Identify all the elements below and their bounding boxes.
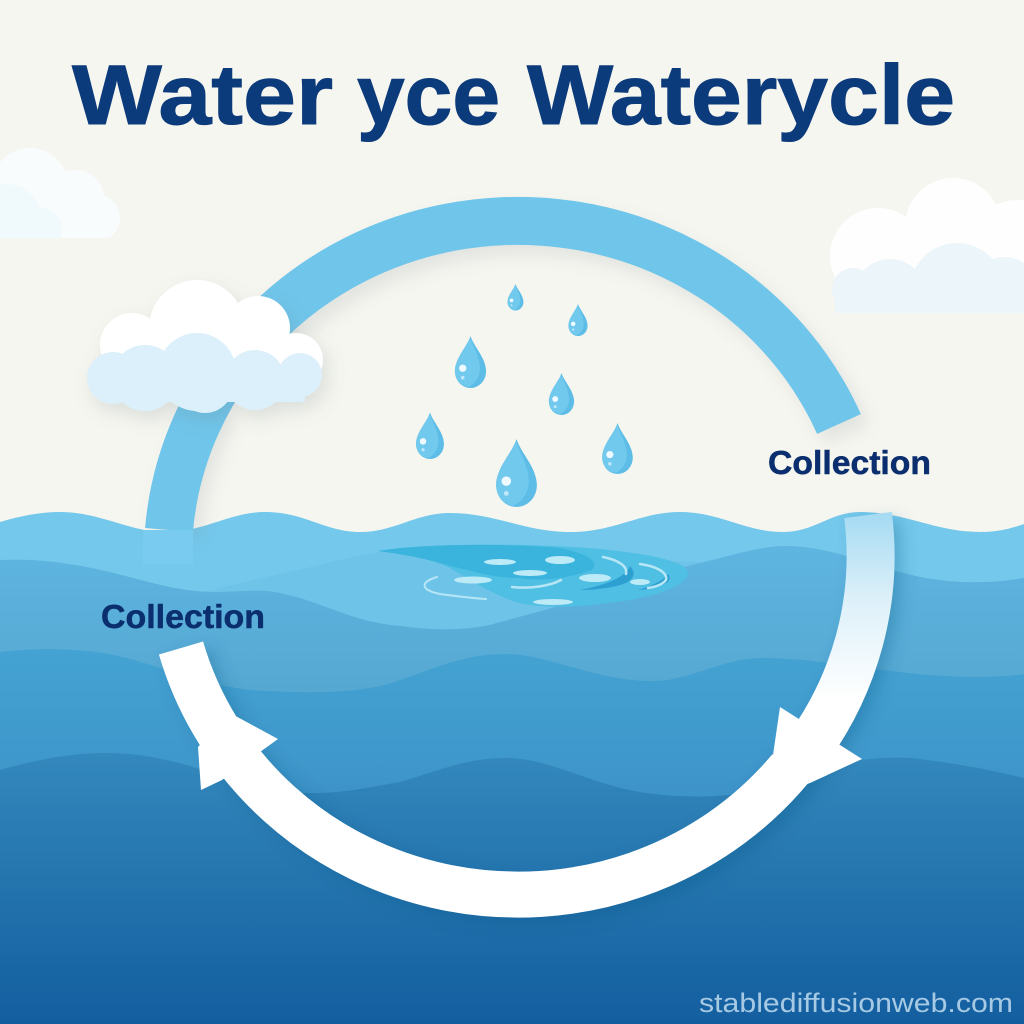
central pool [378, 545, 688, 607]
title [72, 48, 955, 142]
cloud: main left [87, 280, 323, 413]
drop 1 [508, 284, 523, 310]
arc: bottom white arrow [181, 648, 790, 895]
drop 2 [568, 304, 588, 336]
water: third layer [0, 649, 1024, 1024]
pool: swooshes [580, 566, 670, 590]
arrowhead: left [198, 713, 278, 790]
title: yce [357, 48, 500, 142]
pool: dark core [378, 545, 594, 580]
label: collection left: Collection [101, 598, 265, 635]
label: collection right: Collection [768, 444, 931, 481]
drop 4 [549, 373, 574, 415]
drop 5 [416, 412, 444, 459]
water: deep layer [0, 753, 1024, 1024]
water: second layer [0, 546, 1024, 1024]
arc shadows [177, 230, 878, 900]
pool: ripple lines [425, 557, 666, 599]
raindrops [416, 284, 633, 507]
cloud: top right background [830, 178, 1024, 313]
arc: left segment base [143, 530, 193, 564]
arc: blue evaporation arc [169, 221, 839, 530]
cloud: top left background [0, 148, 120, 238]
pool: outer water [378, 545, 688, 607]
title: Water [72, 48, 333, 142]
drop 7 [496, 439, 537, 507]
arc: right fading segment [803, 515, 871, 755]
water: subtle shaded lobe [200, 550, 700, 640]
title: Waterycle [527, 48, 955, 142]
arrowhead: right [773, 707, 862, 790]
water: top layer [0, 512, 1024, 1024]
watermark: stablediffusionweb.com [699, 988, 1013, 1018]
drop 6 [602, 423, 633, 474]
pool: highlights [454, 556, 650, 605]
drop 3 [455, 336, 486, 388]
water layers [0, 512, 1024, 1024]
